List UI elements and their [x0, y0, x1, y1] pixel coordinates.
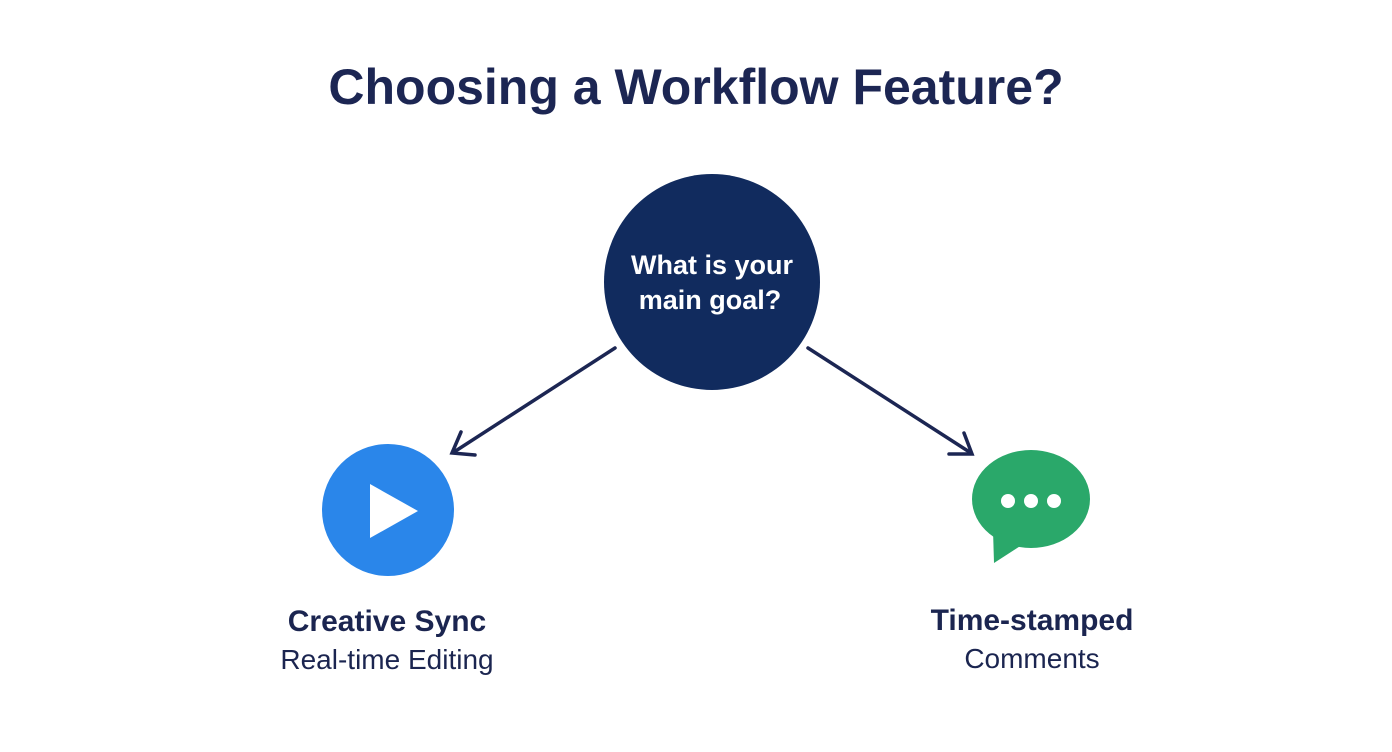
label: Time-stamped Comments: Time-stamped [931, 604, 1133, 637]
label: Time-stamped Comments: Comments [964, 643, 1100, 674]
arrow: right [808, 348, 972, 454]
decision circle [604, 174, 820, 390]
label: Creative Sync [280, 605, 494, 675]
icon: speech bubble [972, 450, 1090, 563]
label: Time-stamped Comments [930, 604, 1133, 674]
icon: play [322, 444, 454, 576]
title: Choosing a Workflow Feature? [328, 59, 1064, 115]
label: Creative Sync: Creative Sync [288, 605, 486, 638]
decision circle: What is your [631, 250, 793, 280]
decision circle: main goal? [639, 285, 781, 315]
label: Creative Sync: Real-time Editing [280, 644, 494, 675]
arrow: left [452, 348, 615, 455]
